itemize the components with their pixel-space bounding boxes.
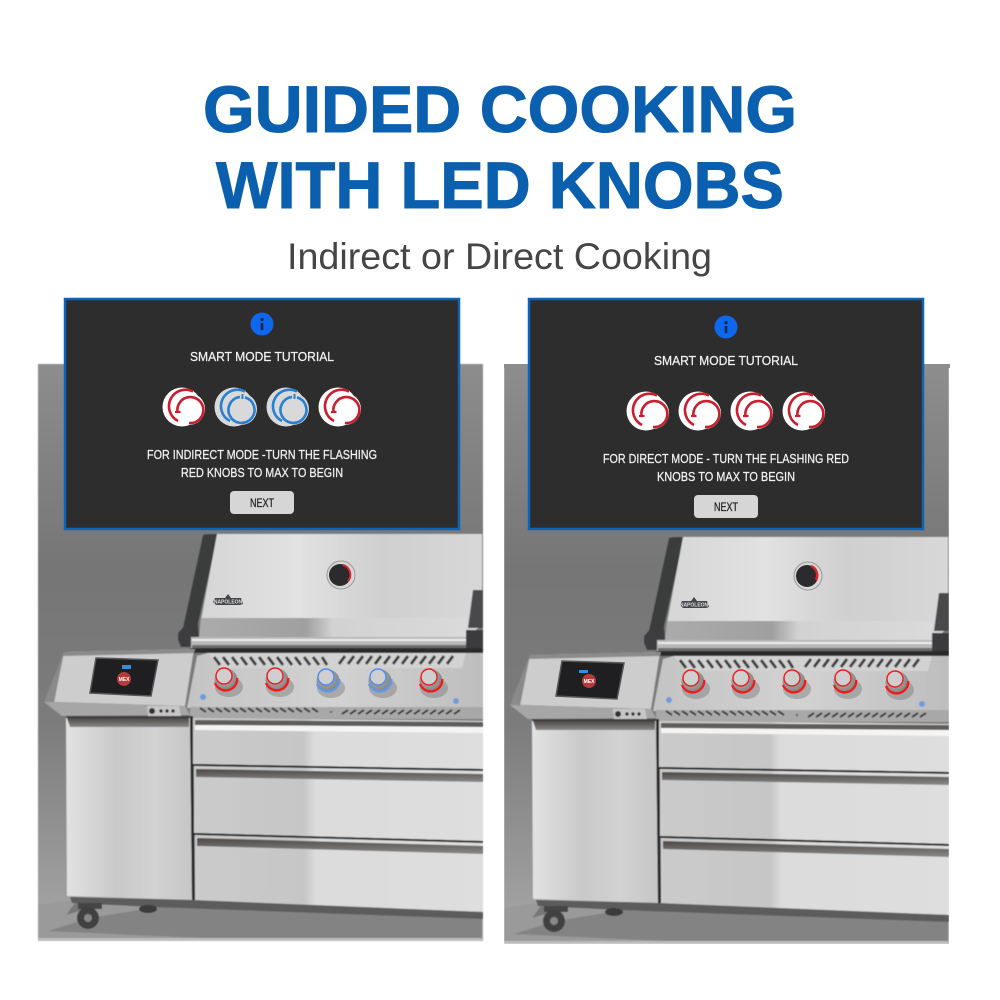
logo: Napoleon badge: NAPOLEON — [214, 600, 243, 606]
next button: NEXT — [250, 496, 274, 510]
knob 4 red — [834, 670, 862, 699]
next button — [230, 491, 294, 514]
knob icon red — [782, 392, 825, 430]
knob 4 blue — [368, 669, 397, 698]
instruction text: KNOBS TO MAX TO BEGIN — [657, 469, 795, 484]
knob icon red — [678, 392, 721, 430]
knob icons row — [626, 392, 825, 430]
subtitle: Indirect or Direct Cooking — [287, 236, 712, 277]
instruction text: RED KNOBS TO MAX TO BEGIN — [181, 465, 343, 480]
logo: Napoleon badge: NAPOLEON — [680, 602, 709, 608]
knob 2 red — [266, 668, 294, 697]
panel: indirect cooking grill photo — [38, 364, 483, 941]
touch screen: MEX — [584, 679, 595, 685]
logo: Napoleon badge — [213, 594, 243, 606]
knob icons row — [162, 388, 361, 426]
panel: direct mode tutorial card — [529, 299, 923, 529]
icon: lid thermometer — [327, 561, 355, 589]
knob 1 red — [214, 668, 243, 697]
title — [203, 72, 797, 222]
LED knobs — [214, 668, 448, 698]
touch screen: MEX — [119, 677, 130, 683]
knob icon red — [730, 392, 773, 430]
next button: NEXT — [714, 500, 738, 514]
LED knobs — [682, 670, 914, 700]
instruction text: FOR DIRECT MODE - TURN THE FLASHING RED — [603, 451, 849, 466]
knob icon red — [626, 392, 669, 430]
icon: lid thermometer — [794, 562, 822, 590]
icon: info — [714, 316, 738, 338]
knob icon red — [162, 388, 205, 426]
panel: indirect mode tutorial card — [65, 299, 459, 529]
instruction text — [147, 447, 377, 480]
heading: SMART MODE TUTORIAL — [654, 353, 798, 368]
icon: info — [250, 312, 274, 336]
title: WITH LED KNOBS — [216, 148, 784, 222]
knob 2 red — [732, 670, 760, 699]
knob 1 red — [682, 670, 710, 699]
instruction text — [603, 451, 849, 484]
touch screen — [90, 658, 158, 696]
logo: Napoleon badge — [680, 597, 709, 608]
knob icon blue — [266, 388, 309, 426]
knob 5 red — [886, 671, 914, 700]
knob 3 blue — [316, 669, 345, 698]
knob 5 red — [420, 669, 448, 698]
title: GUIDED COOKING — [203, 72, 797, 146]
knob icon red — [318, 388, 361, 426]
panel: direct cooking grill photo — [504, 364, 950, 944]
touch screen — [556, 661, 624, 699]
next button — [694, 495, 758, 518]
knob icon blue — [214, 388, 257, 426]
heading: SMART MODE TUTORIAL — [190, 349, 334, 364]
knob 3 red — [782, 670, 811, 699]
instruction text: FOR INDIRECT MODE -TURN THE FLASHING — [147, 447, 377, 462]
